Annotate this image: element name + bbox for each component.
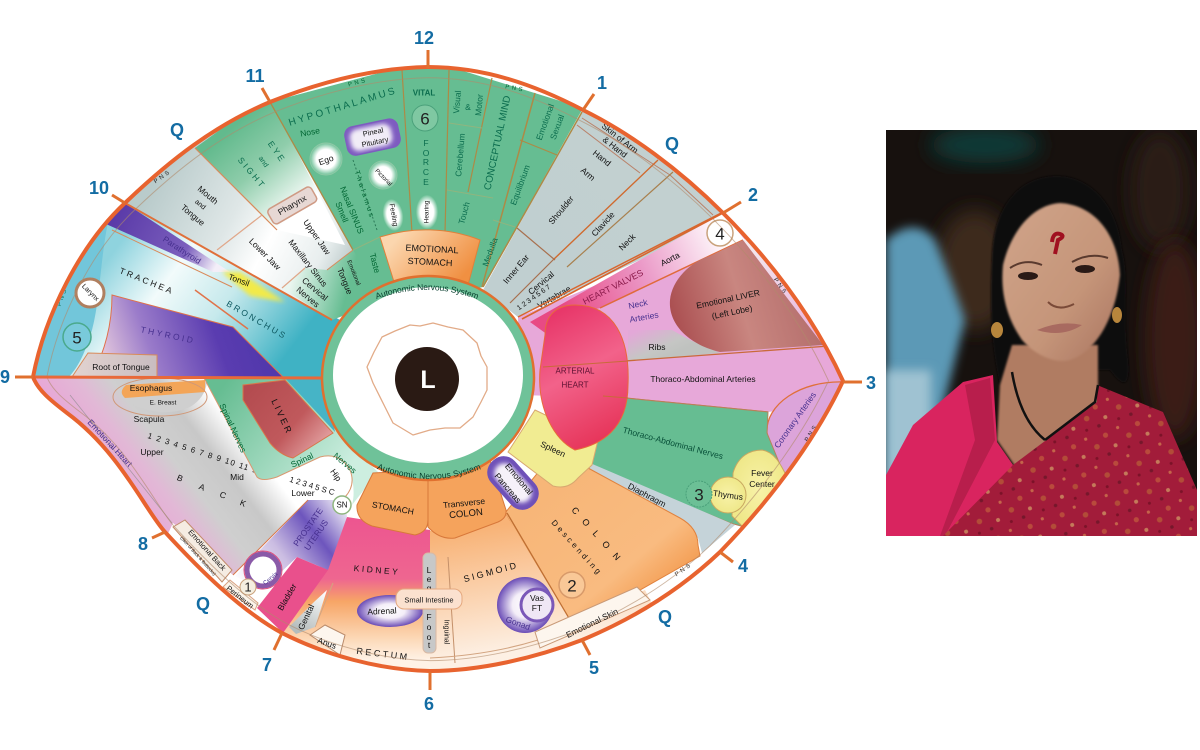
clock ticks [15, 50, 862, 690]
panel: hypothalamus and mind: CONCEPTUAL MIND [483, 95, 513, 191]
emotional liver left lobe: Emotional LIVER [695, 287, 761, 311]
panel: mouth, jaw and sinus: Lower Jaw [247, 236, 284, 273]
gonad circle: Gonad [504, 614, 532, 632]
prostate uterus band: UTERUS [302, 518, 330, 552]
zone number 1 [240, 579, 256, 595]
panel: mouth, jaw and sinus: and [257, 155, 269, 169]
SN circle: SN [336, 500, 348, 510]
iris chart: eye-shaped map [31, 65, 896, 673]
panel: pink artery field: HEART VALVES [581, 267, 645, 307]
panel: shoulder, clavicle and neck [483, 110, 740, 317]
cervix ring: Cervix [263, 571, 279, 587]
panel: sigmoid: Inguinal [442, 620, 450, 645]
diaphragm strip: Diaphragm [626, 481, 668, 509]
ego circle: Ego [317, 153, 335, 167]
panel: back: Hip [328, 467, 344, 483]
eye outline [33, 67, 843, 671]
panel: back: Emotional Heart [86, 417, 135, 469]
panel: trachea, bronchus and thyroid [35, 204, 340, 376]
pictorial circle [369, 161, 397, 189]
eyes and brows [1010, 262, 1042, 268]
emotional pancreas pill: Pancreas [493, 471, 523, 505]
ring label top: Autonomic Nervous System [376, 284, 478, 300]
panel: hypothalamus and mind: Cerebellum [453, 133, 467, 177]
gonad circle: Vas [530, 593, 544, 603]
panel: trachea, bronchus and thyroid: THYROID [140, 324, 196, 346]
panel: mouth, jaw and sinus: EYE [266, 139, 288, 165]
clock numbers and Q markers [0, 28, 876, 714]
leg and foot pill: g [427, 583, 432, 593]
adrenal ellipse: Adrenal [367, 605, 397, 617]
panel: descending colon: COLON [570, 505, 628, 569]
arterial heart: ARTERIAL [556, 366, 595, 376]
esophagus and breast ellipse: E. Breast [150, 400, 177, 406]
hair [991, 176, 1128, 385]
panel: mouth, jaw and sinus: Upper Jaw [301, 217, 333, 257]
panel: trachea, bronchus and thyroid: BRONCHUS [225, 299, 289, 341]
clock numbers and Q markers: 11 [245, 66, 265, 86]
feeling oval [383, 200, 403, 230]
nose and mouth [1048, 302, 1074, 308]
panel: cervical nerves [282, 239, 369, 320]
anus box [310, 625, 345, 655]
ego circle [310, 143, 342, 175]
coronary arteries: PNS [804, 423, 820, 443]
coronary arteries: Coronary Arteries [772, 390, 818, 450]
panel: shoulder, clavicle and neck: Vertebrae [536, 283, 573, 311]
bladder [257, 557, 328, 633]
panel: mouth, jaw and sinus [125, 95, 353, 320]
photo background [886, 130, 1197, 536]
clock numbers and Q markers: 2 [748, 185, 758, 205]
gonad circle: FT [532, 603, 542, 613]
hearing oval [416, 195, 438, 229]
thymus circle: Thymus [712, 488, 744, 502]
panel: kidney and rectum: KIDNEY [353, 563, 401, 577]
pupil with letter L [395, 347, 459, 411]
panel: hypothalamus and mind: Thalamus [353, 170, 375, 220]
panel: back: Scapula [134, 414, 165, 424]
zone number 3 [686, 481, 712, 507]
emotional back box: Emotional Back [186, 528, 228, 573]
panel: mouth, jaw and sinus: and [193, 199, 207, 212]
spleen: Spleen [539, 439, 567, 459]
clock numbers and Q markers: 7 [262, 655, 272, 675]
panel: hypothalamus and mind: E [423, 177, 429, 187]
clock numbers and Q markers: 1 [597, 73, 607, 93]
panel: cervical nerves: Cervical [300, 275, 330, 303]
panel: sigmoid: SIGMOID [462, 560, 520, 584]
clock numbers and Q markers: Q [658, 607, 672, 627]
pupil with letter L: L [420, 366, 436, 394]
panel: back: B [175, 472, 185, 484]
emotional skin strip [535, 587, 650, 648]
esophagus and breast ellipse [113, 378, 207, 416]
zone number 5: 5 [72, 328, 82, 348]
small intestine pill: Small Intestine [404, 596, 454, 604]
panel: spinal nerves: Nerves [331, 451, 359, 475]
panel: back: 1 2 3 4 5 6 7 8 9 10 11 12 [147, 431, 264, 477]
arterial heart [540, 305, 628, 450]
leg and foot pill [423, 553, 436, 653]
panel: pink artery field: Arteries [629, 310, 659, 324]
panel: shoulder, clavicle and neck: Skin of Arm [600, 121, 640, 155]
panel: back: Mid [230, 472, 244, 482]
fever center [732, 450, 787, 529]
panel: spinal nerves: Spinal [289, 450, 315, 470]
gonad circle [497, 577, 553, 633]
zone number 4 [707, 220, 733, 246]
pineal pituitary pill: Pituitary [361, 135, 389, 149]
fever center: Fever [751, 468, 773, 478]
bindi [1052, 234, 1063, 254]
photo: woman in red sari [886, 127, 1200, 536]
transverse colon [428, 460, 506, 538]
clock numbers and Q markers: 3 [866, 373, 876, 393]
panel: hypothalamus and mind: Touch [456, 200, 472, 225]
panel: cervical nerves: Maxillary Sinus [286, 237, 330, 289]
bladder: Bladder [275, 582, 299, 612]
panel: shoulder, clavicle and neck: Cervical [526, 269, 556, 297]
feeling oval: Feeling [388, 203, 398, 227]
cervix ring [244, 551, 282, 589]
leg and foot pill: o [427, 632, 432, 642]
earrings [991, 322, 1003, 338]
clock numbers and Q markers: 8 [138, 534, 148, 554]
panel: back: A [197, 481, 207, 493]
panel: thoraco-abdominal nerves: Thoraco-Abdominal Nerves [622, 425, 724, 461]
panel: hypothalamus and mind: Sexual [548, 113, 566, 141]
genital strip: Genital [296, 603, 316, 631]
panel: shoulder, clavicle and neck: & Hand [601, 134, 629, 160]
ribs area [628, 330, 720, 361]
arterial heart: HEART [562, 380, 589, 390]
panel: back: 1 2 3 4 5 S C [288, 475, 336, 497]
panel: back [28, 377, 352, 575]
esophagus and breast ellipse: Esophagus [130, 383, 172, 393]
panel: pink artery field: Thoraco-Abdominal Arteries [650, 374, 756, 384]
panel: shoulder, clavicle and neck: Arm [579, 165, 597, 183]
panel: mouth, jaw and sinus: Tongue [179, 202, 207, 228]
panel: mouth, jaw and sinus: Mouth [196, 184, 220, 207]
panel: hypothalamus and mind: Visual [451, 90, 463, 114]
clock numbers and Q markers: 12 [414, 28, 434, 48]
leg and foot pill: e [427, 574, 432, 584]
emotional back box [173, 520, 232, 582]
panel: descending colon [505, 468, 700, 625]
emotional back box: (Skin of Back & Buttocks) [179, 535, 217, 577]
perineum strip: Perineum [225, 584, 255, 610]
clock numbers and Q markers: Q [170, 120, 184, 140]
panel: pink artery field: Ribs [648, 342, 666, 352]
red sari [943, 385, 1197, 536]
liver [243, 380, 333, 458]
divider: radial line 2 [522, 213, 723, 319]
panel: hypothalamus and mind: Motor [473, 94, 485, 116]
panel: thoraco-abdominal nerves [588, 398, 785, 527]
zone number 1: 1 [244, 580, 252, 594]
panel: trachea, bronchus and thyroid: TRACHEA [118, 265, 176, 297]
emotional liver left lobe: (Left Lobe) [711, 303, 753, 321]
panel: pink artery field [518, 210, 860, 412]
zone number 6: 6 [420, 110, 430, 128]
panel: shoulder, clavicle and neck: Inner Ear [501, 252, 531, 286]
iris outline [367, 323, 487, 435]
panel: trachea, bronchus and thyroid: Tonsil [227, 272, 251, 288]
inner PNS guide line [47, 78, 829, 661]
emotional liver left lobe [670, 240, 823, 352]
panel: hypothalamus and mind: Smell [333, 200, 351, 224]
panel: hypothalamus and mind: Emotional [534, 102, 556, 141]
pharynx label box [266, 186, 318, 225]
panel: sigmoid [430, 512, 651, 669]
stomach: STOMACH [371, 499, 415, 517]
panel: descending colon: PNS [674, 562, 694, 578]
leg and foot pill: L [427, 565, 432, 575]
root of tongue [72, 353, 157, 377]
panel: back: Upper [140, 447, 164, 457]
panel: shoulder, clavicle and neck: Clavicle [589, 209, 617, 238]
panel: cervical nerves: Nerves [294, 285, 322, 309]
panel: hypothalamus and mind: Nose [299, 125, 321, 139]
face [1002, 203, 1120, 361]
diaphragm strip [587, 463, 735, 553]
panel: mouth, jaw and sinus: SIGHT [236, 155, 268, 191]
pictorial circle: Pictorial [373, 168, 393, 188]
panel: shoulder, clavicle and neck: Hand [591, 148, 613, 168]
emotional pancreas pill [481, 450, 545, 516]
zone number 5 [63, 323, 91, 351]
divider: radial line 10 [125, 203, 332, 320]
panel: shoulder, clavicle and neck: 1 2 3 4 5 6 7 [516, 284, 552, 312]
panel: spinal nerves [204, 378, 378, 505]
panel: cervical nerves: Tongue [335, 266, 355, 296]
panel: trachea, bronchus and thyroid: Root of Tongue [92, 362, 150, 372]
zone number 4: 4 [715, 224, 725, 244]
panel: hypothalamus and mind: VITAL [413, 88, 435, 98]
SN circle [333, 496, 351, 514]
panel: hypothalamus and mind: F [423, 138, 429, 148]
panel: descending colon: Descending [549, 518, 605, 578]
thyroid shape [92, 295, 283, 377]
panel: spinal nerves: Spinal Nerves [217, 402, 249, 454]
pink blouse [886, 375, 1013, 536]
panel: pink artery field: Aorta [659, 250, 682, 268]
pineal pituitary pill: Pineal [362, 125, 384, 139]
panel: hypothalamus and mind: R [423, 157, 429, 167]
coronary arteries [768, 381, 841, 472]
emotional pancreas pill: Emotional [503, 461, 535, 497]
transverse colon: COLON [449, 507, 484, 521]
leg and foot pill: t [428, 640, 431, 650]
central pupil ring: autonomic nervous system [320, 274, 536, 482]
prostate uterus band: PROSTATE [291, 506, 325, 548]
emotional stomach band [380, 230, 480, 285]
panel: shoulder, clavicle and neck: Neck [617, 231, 638, 252]
panel: hypothalamus and mind: O [423, 148, 430, 158]
panel: hypothalamus and mind: Taste [368, 252, 383, 274]
clock numbers and Q markers: 9 [0, 367, 10, 387]
anus box: Anus [316, 635, 338, 651]
small intestine pill [396, 589, 462, 609]
leg and foot pill: F [426, 612, 432, 622]
clock numbers and Q markers: 4 [738, 556, 748, 576]
panel: shoulder, clavicle and neck: Shoulder [546, 194, 576, 226]
panel: hypothalamus and mind: HYPOTHALAMUS [287, 85, 399, 129]
blurred person behind [886, 228, 965, 490]
panel: trachea, bronchus and thyroid: Parathyroid [161, 234, 203, 266]
clock numbers and Q markers: Q [196, 594, 210, 614]
clock numbers and Q markers: 5 [589, 658, 599, 678]
panel: hypothalamus and mind: Nasal SINUS [338, 185, 366, 235]
hearing oval: Hearing [424, 200, 430, 223]
emotional skin strip: Emotional Skin [564, 606, 620, 640]
fever center: Center [749, 479, 775, 489]
clock numbers and Q markers: Q [665, 134, 679, 154]
panel: hypothalamus and mind: & [465, 102, 471, 112]
icon: larynx ring [76, 279, 104, 307]
panel: pink artery field: PNS [772, 277, 788, 297]
stomach [357, 470, 428, 535]
panel: kidney and rectum: RECTUM [356, 646, 410, 662]
neck [997, 345, 1100, 466]
spleen [508, 410, 598, 487]
panel: mouth, jaw and sinus: PNS [153, 169, 173, 185]
divider: horizontal line 9 [33, 377, 322, 378]
zone number 6 [412, 105, 438, 131]
clock numbers and Q markers: 6 [424, 694, 434, 714]
panel: back: C [218, 489, 228, 501]
panel: hypothalamus and mind: Medulla [480, 236, 500, 268]
thymus circle [710, 477, 746, 513]
panel: hypothalamus and mind: C [423, 167, 429, 177]
leg and foot pill: o [427, 622, 432, 632]
transverse colon: Transverse [442, 496, 486, 510]
panel: trachea, bronchus and thyroid: PNS [57, 287, 69, 307]
emotional stomach band: EMOTIONAL [405, 243, 459, 255]
panel: pink artery field: Neck [627, 297, 649, 311]
genital strip [289, 590, 327, 634]
zone number 2: 2 [567, 576, 577, 596]
panel: hypothalamus and mind: PNS [505, 84, 525, 94]
panel: back: Lower [291, 488, 315, 498]
necklace [1012, 372, 1098, 440]
liver: LIVER [269, 397, 295, 437]
zone number 2 [559, 572, 585, 598]
panel: back: K [238, 497, 248, 509]
ring label bottom: Autonomic Nervous System [376, 464, 481, 480]
pharynx label box: Pharynx [276, 193, 309, 217]
clock numbers and Q markers: 10 [89, 178, 109, 198]
icon: larynx ring: Larynx [80, 283, 100, 303]
panel: hypothalamus and mind [270, 60, 583, 300]
adrenal ellipse [357, 595, 423, 627]
panel: hypothalamus and mind: Equilibrium [508, 164, 532, 206]
panel: hypothalamus and mind: PNS [348, 78, 368, 88]
pineal pituitary pill [344, 118, 401, 156]
teal wedge by ring [285, 378, 335, 432]
panel: cervical nerves: Emotional [345, 260, 361, 286]
emotional stomach band: STOMACH [407, 256, 453, 268]
zone number 3: 3 [694, 486, 704, 504]
prostate uterus band [233, 500, 347, 590]
panel: kidney and rectum [284, 517, 430, 669]
